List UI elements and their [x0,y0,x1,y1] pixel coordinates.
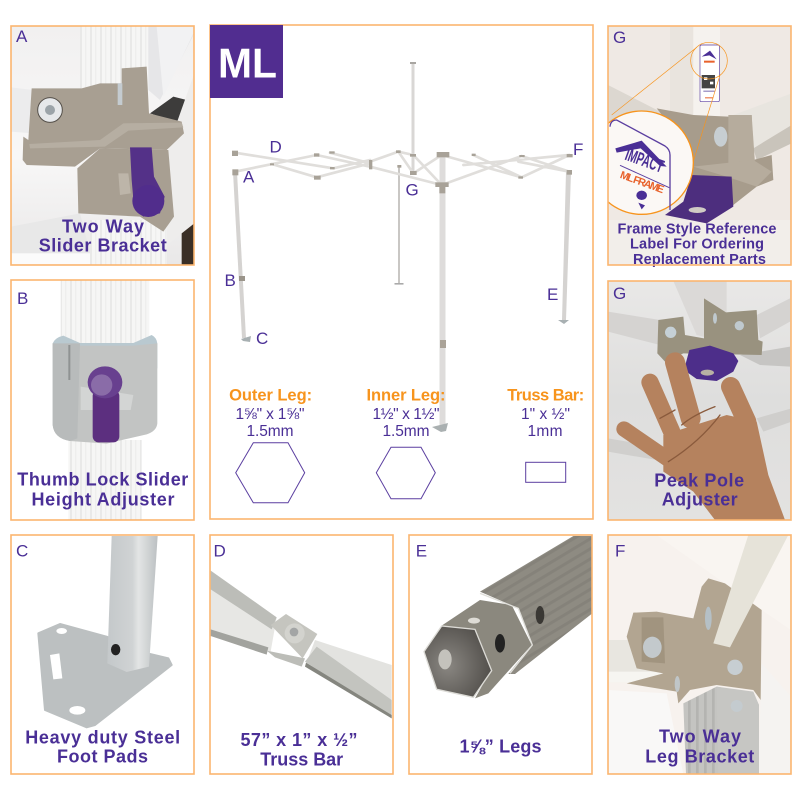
spec: inner leg: 1½" x 1½" [372,406,440,423]
caption: two way slider bracket [39,217,167,256]
caption: truss bar dimensions [240,730,358,770]
hand [624,362,785,520]
enlarged frame label [610,120,670,210]
panel: main frame diagram [210,25,593,519]
caption: two way leg bracket [645,727,754,767]
caption: two way slider bracket: Two Way [62,217,144,237]
panel: D truss bar [210,535,394,775]
caption: frame style reference label: Label For Ordering [630,236,764,252]
spec: truss bar: 1mm [528,423,562,440]
panel letter G: G [613,28,626,47]
caption: frame style reference label: Frame Style Reference [618,221,776,237]
left leg [233,172,251,342]
photo: slider bracket [11,26,194,265]
photo: label on peak bracket [608,26,790,264]
caption: heavy duty steel foot pads: Foot Pads [57,747,148,767]
peak pole [410,62,416,175]
diagram callout letters: A [243,168,255,187]
diagram callout letters: F [573,140,583,159]
back pole [394,165,404,285]
photo: thumb lock on leg [52,280,158,520]
magnifier lines [612,42,727,167]
spec: inner leg: Inner Leg: [366,387,446,405]
panel: G frame style reference label [590,26,792,268]
diagram callout letters: D [270,138,282,157]
panel letter E: E [416,542,427,561]
caption: frame style reference label: Replacement Parts [633,252,766,268]
panel: B thumb lock slider [11,280,195,520]
panel: C steel foot pads [11,535,195,775]
panel letter F: F [615,542,625,561]
panel: F two way leg bracket [608,535,792,775]
hexagon inner leg profile [376,447,435,499]
caption: two way slider bracket: Slider Bracket [39,236,167,256]
spec: inner leg [366,387,446,499]
caption: two way leg bracket: Two Way [659,727,741,747]
truss scissors [235,152,569,185]
diagram callout letters [224,138,583,348]
label tag [700,45,719,102]
panel letter C: C [16,542,28,561]
spec: outer leg: 1⅝" x 1⅝" [236,406,304,423]
photo: hand turning peak knob [607,281,792,520]
hexagon outer leg profile [236,443,305,503]
caption: thumb lock slider height adjuster: Thumb Lock Slider [17,470,188,490]
caption: truss bar dimensions: Truss Bar [260,750,343,770]
caption: legs size: 1⅝” Legs [460,737,542,757]
spec: inner leg: 1.5mm [382,423,430,440]
caption: frame style reference label [618,221,776,268]
spec: outer leg: 1.5mm [246,423,294,440]
diagram callout letters: C [256,329,268,348]
ML badge [210,25,283,98]
caption: thumb lock slider height adjuster [17,470,188,510]
caption: heavy duty steel foot pads: Heavy duty Steel [25,727,180,747]
ML badge: ML [218,39,277,86]
panel letter D: D [214,542,226,561]
enlarged frame label: ML FRAME [618,169,666,196]
spec: truss bar [507,387,584,482]
panel letter G: G [613,284,626,303]
magnifier lens [608,110,694,215]
caption: peak pole adjuster [654,470,744,510]
panel: A two way slider bracket [11,26,194,265]
caption: two way leg bracket: Leg Bracket [645,747,754,767]
panel letter A: A [16,27,28,46]
photo: foot pad with leg [37,536,173,728]
caption: truss bar dimensions: 57” x 1” x ½” [240,730,358,750]
front leg [432,155,448,432]
caption: thumb lock slider height adjuster: Height Adjuster [32,490,174,510]
truss brackets [232,150,573,193]
photo: hexagonal leg tube [423,536,592,698]
photo: leg bracket [608,535,792,775]
diagram callout letters: B [224,271,236,290]
caption: peak pole adjuster: Adjuster [662,490,738,510]
rectangle truss bar profile [526,462,566,482]
spec: truss bar: Truss Bar: [507,387,584,405]
enlarged frame label: IMPACT [623,144,666,177]
diagram callout letters: G [406,181,419,200]
spec: outer leg: Outer Leg: [229,387,312,405]
panel letter B: B [17,289,28,308]
photo: truss bars with joint [210,570,392,718]
spec: outer leg [229,387,312,503]
right leg [558,172,571,324]
canopy frame illustration [232,62,573,432]
diagram callout letters: E [547,285,558,304]
panel: E legs [408,535,592,775]
spec: truss bar: 1" x ½" [521,406,570,423]
caption: heavy duty steel foot pads [25,727,180,767]
caption: peak pole adjuster: Peak Pole [654,470,744,490]
panel: G peak pole adjuster [607,281,792,520]
